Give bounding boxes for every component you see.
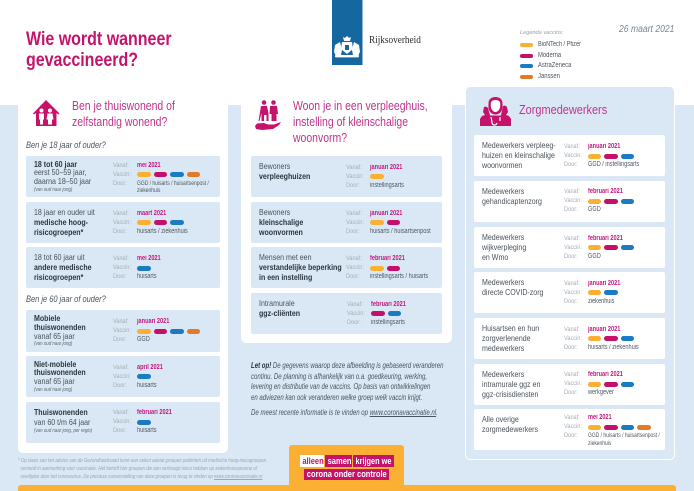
row: overige zorgmedewerkers [474, 409, 665, 450]
row label: gehandicaptenzorg [482, 196, 541, 206]
heading: Zorgmedewerkers [519, 102, 607, 117]
row schedule: februari 2021 [588, 188, 622, 195]
row label: (van oud naar jong) [34, 187, 72, 193]
row label [482, 323, 539, 353]
row schedule: Vanaf: [564, 371, 579, 378]
row label: risicogroepen* [34, 227, 83, 237]
row schedule: GGD / instellingsarts [588, 161, 639, 168]
row: intramurale ggz [474, 364, 665, 404]
row schedule: huisarts [137, 427, 157, 434]
row schedule: huisarts / huisartsenpost [370, 228, 431, 234]
row: verpleeghuizen [474, 135, 665, 176]
row label [34, 358, 86, 393]
note: let op: Let op! De gegevens waarop deze afbeelding is gebaseerd veranderen [251, 361, 444, 370]
row schedule [346, 164, 404, 188]
row schedule: Vaccin: [564, 423, 581, 430]
legend: Janssen: Janssen [538, 73, 560, 80]
row schedule: Door: [113, 273, 127, 280]
row schedule: instellingsarts / huisarts [370, 273, 428, 280]
row label [482, 186, 542, 206]
heading: Ben je thuiswonend of [72, 99, 175, 113]
row label: verpleeghuizen [259, 171, 310, 181]
row schedule: Vanaf: [564, 143, 579, 150]
row schedule: Vaccin: [346, 172, 364, 180]
row schedule: april 2021 [137, 364, 163, 370]
row schedule: instellingsarts [371, 318, 405, 326]
logo wordmark: Rijksoverheid [369, 35, 421, 46]
row schedule: Vaccin: [346, 218, 364, 226]
row schedule: Door: [564, 206, 577, 213]
row schedule: Vaccin: [113, 372, 131, 380]
row label [34, 313, 86, 347]
word: krijgen we: krijgen we [356, 456, 391, 466]
row: 18 tot 60 jaar [26, 156, 220, 197]
row label [34, 158, 92, 193]
row schedule: Vaccin: [347, 310, 365, 316]
row schedule: Vanaf: [113, 255, 129, 262]
row label: Thuiswonenden [34, 406, 88, 416]
row schedule: werkgever [588, 389, 613, 396]
title: Wie wordt wanneer [26, 28, 172, 50]
row schedule: Vanaf: [113, 210, 129, 216]
row schedule: GGD [588, 252, 600, 260]
footnote [18, 457, 266, 481]
row schedule: Vanaf: [564, 326, 579, 332]
note: let op: levering en distributie van de vaccins. Op basis van ontwikkelingen [251, 382, 430, 391]
row schedule: ziekenhuis [588, 298, 614, 304]
row label: intramurale ggz en [482, 378, 540, 388]
row label: andere medische [34, 262, 92, 272]
row label: ggz-crisisdiensten [482, 388, 538, 398]
row label [482, 140, 556, 170]
row label: Mobiele [34, 313, 60, 323]
word: alleen: alleen [302, 456, 324, 466]
date: 26 maart 2021 [619, 24, 674, 35]
row: medische hoog-risicogroepen [26, 202, 220, 243]
row schedule: Door: [113, 382, 127, 388]
heading [293, 99, 428, 145]
row schedule: Vaccin: [564, 380, 581, 387]
row schedule: Door: [564, 389, 577, 396]
row schedule: huisarts / ziekenhuis [588, 344, 638, 350]
icon: people on a hand [255, 100, 281, 130]
row label: ggz-cliënten [259, 308, 300, 318]
legend: AstraZeneca: AstraZeneca [538, 62, 571, 69]
row label: Medewerkers verpleeg- [482, 140, 555, 150]
subheading: 60 jaar: Ben je 60 jaar of ouder? [26, 294, 106, 304]
row schedule: Vanaf: [564, 280, 579, 286]
heading: zelfstandig wonend? [72, 115, 167, 129]
heading: woonvorm? [293, 131, 347, 145]
row label: in een instelling [259, 272, 312, 282]
row label: 18 tot 60 jaar uit [34, 252, 85, 262]
row label [34, 252, 92, 282]
row label: huizen en kleinschalige [482, 150, 554, 160]
row schedule: GGD [137, 336, 150, 343]
row label [482, 232, 526, 262]
row label [34, 406, 92, 434]
footnote: overlijden door het coronavirus. De precieze samenstelling van deze groepen is terug te vinden op www.coronavaccinatie.nl [20, 474, 262, 480]
row schedule: Vaccin: [113, 218, 131, 226]
row schedule: Door: [346, 182, 360, 188]
row schedule: februari 2021 [371, 300, 406, 308]
row label: Huisartsen en hun [482, 323, 539, 333]
row: bewoners verpleeghuizen [251, 156, 442, 197]
row schedule: Vanaf: [346, 164, 362, 170]
row schedule: Vanaf: [346, 210, 362, 216]
row schedule: januari 2021 [588, 143, 620, 150]
row: mobiele thuiswonenden [26, 310, 220, 352]
row schedule: januari 2021 [370, 210, 402, 216]
note: let op [251, 361, 444, 417]
row schedule: Door: [346, 228, 360, 234]
row schedule: mei 2021 [588, 414, 611, 421]
note: let op: en adviezen kan ook veranderen welke groep welk vaccin krijgt. [251, 393, 422, 402]
row schedule: januari 2021 [370, 164, 402, 170]
legend: Moderna: Moderna [538, 52, 561, 59]
row schedule [564, 324, 664, 352]
note: let op: De meest recente informatie is te vinden op www.coronavaccinatie.nl. [251, 408, 438, 417]
row label: thuiswonenden [34, 322, 86, 332]
row label: zorgmedewerkers [482, 424, 538, 434]
row label: wijkverpleging [482, 242, 526, 252]
row schedule: Vaccin: [564, 152, 581, 159]
row schedule: Vaccin: [113, 418, 131, 425]
row schedule [347, 300, 406, 326]
row schedule: Door: [564, 432, 577, 439]
row label: verstandelijke beperking [259, 262, 342, 272]
row label: kleinschalige [259, 217, 303, 227]
row label: 18 jaar en ouder uit [34, 207, 95, 217]
row label: vanaf 65 jaar [34, 331, 75, 341]
row schedule: Door: [113, 228, 127, 234]
row schedule: Vanaf: [564, 414, 579, 421]
row schedule: Vanaf: [113, 364, 129, 370]
bottom banner [18, 445, 676, 491]
row label: Medewerkers [482, 186, 524, 196]
row schedule: Door: [113, 336, 127, 343]
row label [482, 414, 538, 434]
legend title: Legenda vaccins: [520, 30, 564, 36]
row schedule: februari 2021 [137, 409, 172, 416]
panel: zorgmedewerkers [465, 87, 675, 460]
row schedule: GGD [588, 206, 600, 213]
row schedule: Vaccin: [113, 170, 131, 178]
row label: directe COVID-zorg [482, 287, 543, 297]
heading: Woon je in een verpleeghuis, [293, 99, 428, 113]
row label [259, 252, 342, 282]
row: thuiswonenden 60 t/m 64 jaar [26, 402, 220, 442]
row schedule: Door: [346, 273, 360, 280]
row: huisartsen [474, 318, 665, 359]
row schedule: Vanaf: [347, 300, 363, 308]
row schedule: Vanaf: [113, 318, 129, 325]
title: gevaccineerd? [26, 48, 138, 70]
row label: medische hoog- [34, 217, 88, 227]
row label: 18 tot 60 jaar [34, 158, 77, 168]
row label: Mensen met een [259, 252, 311, 262]
row schedule: Vanaf: [113, 162, 129, 168]
row: niet-mobiele thuiswonenden [26, 356, 220, 397]
row schedule [113, 210, 188, 234]
row schedule: Vanaf: [564, 188, 579, 195]
logo ribbon with crest [332, 0, 362, 65]
row label: thuiswonenden [34, 367, 86, 377]
row label: risicogroepen* [34, 272, 83, 282]
row schedule: mei 2021 [137, 162, 161, 168]
banner tab [289, 445, 404, 487]
row: gehandicaptenzorg [474, 181, 665, 222]
row label: woonvormen [482, 160, 522, 170]
words: corona onder controle: corona onder controle [307, 468, 386, 478]
row label: Bewoners [259, 161, 290, 171]
word: samen: samen [328, 456, 352, 466]
row label: Niet-mobiele [34, 358, 76, 368]
row schedule: Vanaf: [564, 234, 579, 242]
row label: van 60 t/m 64 jaar [34, 416, 90, 426]
row schedule: Vaccin: [564, 244, 581, 250]
slogan [300, 455, 396, 480]
row schedule: instellingsarts [370, 182, 404, 188]
row: andere medische risicogroepen [26, 247, 220, 288]
icon: care workers [480, 97, 511, 126]
row schedule: maart 2021 [137, 210, 166, 216]
row schedule: Door: [564, 161, 577, 168]
background band [0, 105, 694, 491]
legend: Janssen [520, 73, 560, 80]
row schedule: februari 2021 [588, 234, 622, 242]
row label [34, 207, 95, 237]
row label [482, 277, 543, 297]
row schedule: Vaccin: [113, 264, 131, 271]
legend: BioNTech: BioNTech / Pfizer [538, 41, 581, 48]
footnote: vermeld in aanmerking voor vaccinatie. Het betreft hier groepen die een verhoogd risico hebben op ziekenhuisopname of [20, 466, 257, 472]
row label: eerst 50–59 jaar, [34, 167, 87, 177]
legend: AstraZeneca [520, 62, 572, 69]
row label: (van oud naar jong) [34, 387, 72, 393]
footnote: * Op basis van het advies van de Gezondheidsraad komt een select aantal groepen patiënten uit medische hoog-risicogroepen [18, 458, 266, 464]
row schedule: februari 2021 [370, 255, 405, 262]
heading [72, 99, 175, 129]
row schedule: GGD / huisarts / huisartsenpost / [588, 432, 659, 439]
row schedule: Door: [347, 318, 361, 326]
row label: Alle overige [482, 414, 518, 424]
title [26, 28, 172, 70]
legend: Moderna [520, 52, 562, 59]
row schedule: Door: [113, 180, 127, 186]
row label: Medewerkers [482, 232, 524, 242]
row label: woonvormen [259, 227, 303, 237]
row schedule [564, 278, 664, 306]
row schedule: februari 2021 [588, 371, 622, 378]
panel: verpleeghuis [241, 87, 452, 343]
row label [259, 161, 310, 181]
row schedule: Door: [564, 344, 577, 350]
row schedule: Vanaf: [346, 255, 362, 262]
row schedule: Vaccin: [564, 334, 581, 342]
row schedule [564, 413, 664, 440]
row schedule: Door: [564, 298, 577, 304]
row schedule [113, 409, 172, 434]
row schedule [346, 210, 431, 234]
row: bewoners kleinschalige woonvormen [251, 202, 442, 243]
legend [520, 30, 581, 80]
row schedule [346, 255, 428, 280]
heading: instelling of kleinschalige [293, 115, 408, 129]
row schedule: Door: [113, 427, 127, 434]
row schedule: Door: [564, 252, 577, 260]
logo: Rijksoverheid [332, 0, 421, 65]
banner strip [18, 485, 676, 491]
row label: zorgverlenende [482, 333, 530, 343]
row schedule [564, 370, 664, 397]
row schedule: huisarts / ziekenhuis [137, 228, 188, 234]
row: overige zorgmedewerkers: ziekenhuis [588, 440, 611, 447]
row schedule: GGD / huisarts / huisartsenpost / [137, 180, 209, 186]
row schedule: Vaccin: [346, 264, 364, 271]
row schedule [564, 143, 640, 168]
row label: vanaf 65 jaar [34, 376, 75, 386]
row label: medewerkers [482, 343, 524, 353]
row: intramurale ggz-cliënten [251, 293, 442, 334]
row schedule: mei 2021 [137, 255, 161, 262]
row schedule: Vaccin: [564, 197, 581, 204]
row schedule: Vaccin: [564, 288, 581, 296]
row label: (van oud naar jong, per regio) [34, 428, 92, 434]
row: 18 tot 60 jaar: ziekenhuis [137, 187, 160, 194]
row schedule [564, 188, 634, 213]
subheading: 18 jaar: Ben je 18 jaar of ouder? [26, 140, 106, 150]
row: wijkverpleging [474, 226, 665, 268]
row label: en Wmo [482, 252, 508, 262]
row label: Bewoners [259, 207, 290, 217]
row label [259, 207, 303, 237]
panel: thuiswonend [18, 87, 228, 453]
row label: Medewerkers [482, 277, 524, 287]
row label: Medewerkers [482, 368, 524, 378]
row schedule [113, 364, 163, 388]
row schedule: Vaccin: [113, 327, 131, 334]
row schedule: huisarts [137, 382, 157, 388]
row schedule: Vanaf: [113, 409, 129, 416]
row label: daarna 18–50 jaar [34, 176, 91, 186]
row schedule [113, 255, 161, 280]
row label: Intramurale [259, 298, 295, 308]
row label [482, 368, 540, 398]
row label: (van oud naar jong) [34, 341, 72, 347]
row schedule [113, 162, 209, 194]
row schedule [113, 318, 200, 343]
note: let op: continu. De planning is afhankelijk van o.a. goedkeuring, werking, [251, 372, 427, 381]
row schedule: januari 2021 [588, 280, 620, 286]
row schedule: huisarts [137, 273, 157, 280]
row: COVID-zorg [474, 272, 665, 313]
row schedule: januari 2021 [588, 326, 620, 332]
row: verstandelijke beperking [251, 247, 442, 288]
row schedule: januari 2021 [137, 318, 169, 325]
row schedule [564, 234, 634, 260]
icon: house with family [33, 100, 60, 126]
row label [259, 298, 300, 318]
